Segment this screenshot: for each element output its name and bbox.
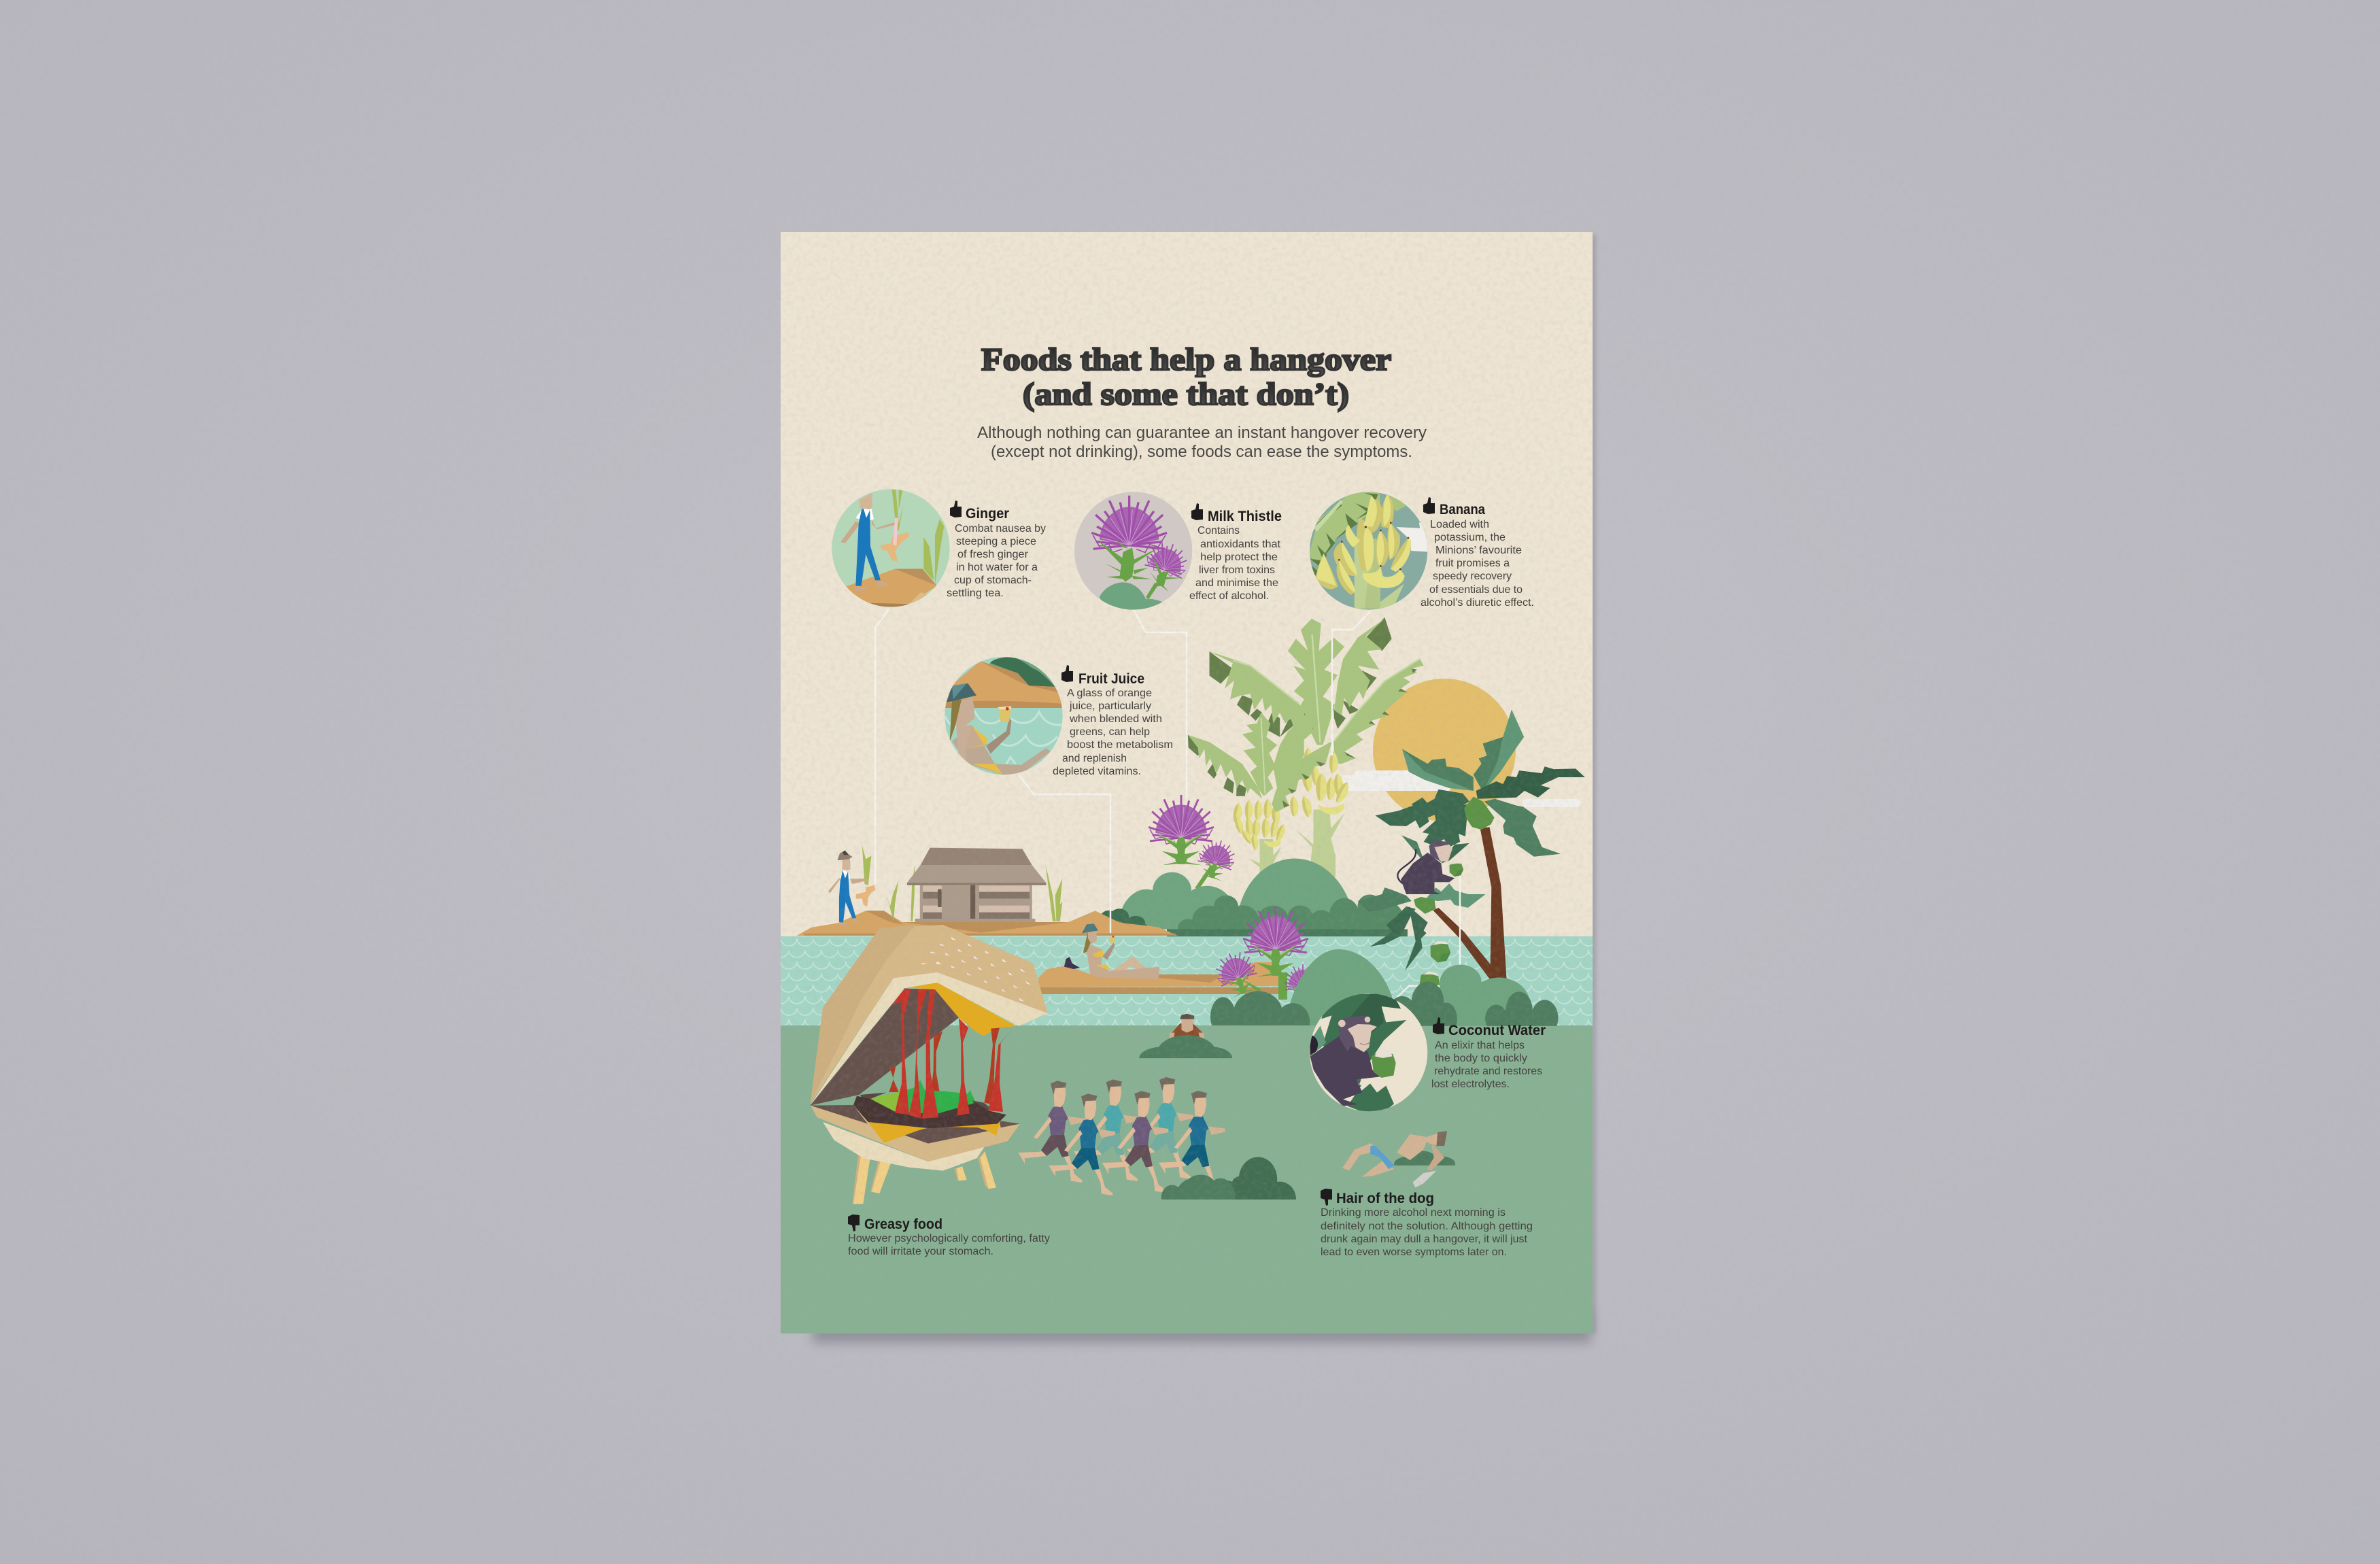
card: ginger: settling tea. [947,588,1004,599]
leaf: long right [1333,658,1424,764]
sesame seeds [921,936,1031,1002]
upper patty [811,988,959,1106]
beach island [1038,962,1278,994]
card: greasy food: Greasy food [864,1217,942,1232]
subtitle: (except not drinking), some foods can ease the symptoms. [991,443,1412,461]
card: fruit juice: boost the metabolism [1067,739,1173,751]
palm tree [1358,709,1585,995]
lower patty [860,1093,993,1113]
card: coconut water: lost electrolytes. [1431,1078,1510,1090]
burger [811,925,1048,1204]
card: coconut water: An elixir that helps [1435,1040,1525,1051]
fallen coconuts [1431,941,1450,962]
card: fruit juice: and replenish [1062,753,1127,764]
coconut crown [1464,797,1495,830]
sunbathing woman [1064,923,1159,979]
banana bunch right [1289,748,1352,818]
hut [907,848,1046,922]
card: banana: speedy recovery [1433,571,1512,582]
card: hair of the dog: definitely not the solution. Although getting [1321,1221,1533,1232]
card: milk thistle: Milk Thistle [1208,509,1282,524]
trunk big [1296,810,1344,877]
card: coconut water: rehydrate and restores [1434,1066,1542,1077]
watcher behind bush [1139,1014,1232,1058]
card: hair of the dog: Drinking more alcohol next morning is [1321,1207,1506,1219]
card: milk thistle: Contains [1197,525,1240,537]
card: fruit juice [1053,665,1173,777]
subtitle [977,424,1427,461]
coconut lower crown [1414,897,1435,914]
card: coconut water: the body to quickly [1435,1053,1527,1064]
lower fronds [1401,835,1425,864]
card: banana [1421,497,1534,609]
card: banana: Minions’ favourite [1435,545,1522,556]
thistle: back large [1149,795,1214,865]
reeds [885,864,1062,921]
runners [1018,1077,1225,1195]
bush [1139,1035,1232,1058]
title: (and some that don’t) [1023,377,1349,412]
card: banana: of essentials due to [1429,584,1523,596]
card: milk thistle: help protect the [1200,551,1278,563]
trunks [1480,827,1507,987]
leaf: upper left [1210,651,1314,737]
card: banana: potassium, the [1434,532,1506,543]
card: hair of the dog: Hair of the dog [1336,1191,1434,1206]
card: banana: alcohol’s diuretic effect. [1421,597,1534,609]
banana bunch left [1232,799,1287,851]
upper cheese [906,983,1017,1036]
card: ginger: cup of stomach- [954,575,1032,586]
card: ginger: of fresh ginger [957,549,1029,560]
leaf: top centre [1288,619,1344,745]
grain overlay [781,232,1593,1333]
back hills and bushes [1118,858,1408,936]
thistle: back small [1193,836,1239,889]
card: ginger: Combat nausea by [955,523,1046,534]
card: fruit juice: A glass of orange [1067,687,1152,699]
leaf: upper right [1333,617,1392,729]
card: hair of the dog [1321,1189,1533,1258]
card: milk thistle: effect of alcohol. [1189,590,1269,602]
cheese lower [853,1106,1001,1143]
clouds [1342,770,1581,807]
upper fronds [1474,709,1524,792]
title: Foods that help a hangover [981,342,1391,377]
thistle: foreground group [1210,906,1321,1003]
lettuce [870,1080,976,1114]
leaf: middle right [1273,713,1314,788]
upper bun [811,925,1048,1104]
card: greasy food [848,1214,1050,1257]
circle: milk thistle [1074,491,1197,613]
card: milk thistle [1189,503,1282,602]
banana trees [1188,617,1424,877]
card: fruit juice: greens, can help [1070,726,1150,738]
card: milk thistle: and minimise the [1195,577,1278,589]
monkey on palm [1397,840,1463,894]
leaf: lower left [1188,735,1262,799]
card: ginger: Ginger [966,506,1009,522]
bushes beside runners [1161,1157,1296,1200]
circle: ginger [830,488,952,610]
card: hair of the dog: drunk again may dull a hangover, it will just [1321,1234,1528,1245]
small monkey on beach [1064,957,1080,969]
card: milk thistle: liver from toxins [1199,564,1275,576]
leaf: centre small [1242,712,1277,796]
legs [852,1151,988,1204]
card: banana: fruit promises a [1435,558,1510,569]
circle: fruit juice [943,655,1066,777]
card: coconut water [1431,1017,1546,1090]
title [981,342,1391,412]
poster shadow [813,235,1596,1343]
card: hair of the dog: lead to even worse symptoms later on. [1321,1246,1507,1258]
card: ginger: in hot water for a [956,562,1038,573]
trunk small [1248,839,1281,874]
farmer [828,845,875,926]
front bushes [1210,965,1558,1026]
sand [796,911,1178,936]
card: banana: Loaded with [1430,519,1489,530]
dark sauce strands [931,1028,1000,1105]
card: ginger [947,500,1046,599]
subtitle: Although nothing can guarantee an instant hangover recovery [977,424,1427,442]
card: fruit juice: Fruit Juice [1078,671,1144,687]
card: fruit juice: juice, particularly [1069,700,1151,712]
red sauce strands [892,989,1012,1119]
collapsed man [1342,1131,1455,1187]
hut island [796,848,1178,936]
circle: banana [1309,491,1431,613]
sun [1373,679,1516,821]
card: fruit juice: when blended with [1069,713,1162,725]
card: ginger: steeping a piece [956,536,1036,547]
leaf: lower right [1272,741,1332,812]
card: coconut water: Coconut Water [1448,1023,1546,1038]
card: fruit juice: depleted vitamins. [1053,766,1141,777]
front mound [1285,949,1398,1025]
card: milk thistle: antioxidants that [1200,539,1281,550]
poster background [781,232,1593,1333]
upper bun lip [811,972,1048,1105]
connector lines [875,607,1460,999]
lower bun [823,1122,986,1171]
circle: coconut water [1310,993,1428,1111]
card: banana: Banana [1440,502,1485,517]
card: greasy food: However psychologically comforting, fatty [848,1233,1050,1244]
card: greasy food: food will irritate your stomach. [848,1246,993,1257]
small bush behind island [1100,908,1149,928]
